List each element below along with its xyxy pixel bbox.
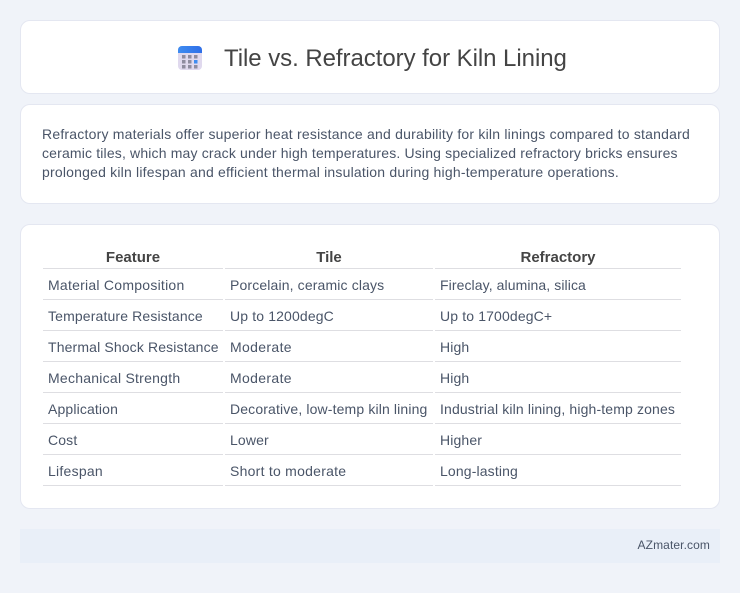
summary panel <box>20 104 720 204</box>
row: temperature resistance: Up to 1200degC <box>230 308 334 324</box>
row: lifespan: Lifespan <box>48 463 103 479</box>
comparison table <box>43 249 681 486</box>
title: Tile vs. Refractory for Kiln Lining <box>224 45 567 72</box>
header panel <box>20 20 720 94</box>
summary text: ceramic tiles, which may crack under high temperatures. Using specialized refractory bricks ensures <box>42 145 678 161</box>
column headers: Tile <box>316 249 342 266</box>
footer credit: AZmater.com <box>638 538 710 552</box>
row: lifespan: Long-lasting <box>440 463 518 479</box>
row: lifespan <box>48 463 518 479</box>
row: temperature resistance: Temperature Resistance <box>48 308 203 324</box>
column headers: Feature <box>106 249 160 266</box>
column headers: Refractory <box>520 249 596 266</box>
row: thermal shock resistance: High <box>440 339 469 355</box>
row: application: Industrial kiln lining, high-temp zones <box>440 401 675 417</box>
row: material composition: Porcelain, ceramic clays <box>230 277 384 293</box>
row: mechanical strength <box>48 370 469 386</box>
row: cost: Higher <box>440 432 482 448</box>
table panel <box>20 224 720 509</box>
row: lifespan: Short to moderate <box>230 463 346 479</box>
row: cost <box>48 432 482 448</box>
row: application: Application <box>48 401 118 417</box>
footer bar <box>20 529 720 563</box>
row: application <box>48 401 675 417</box>
row: temperature resistance <box>48 308 552 324</box>
row: cost: Cost <box>48 432 77 448</box>
row: mechanical strength: High <box>440 370 469 386</box>
row: temperature resistance: Up to 1700degC+ <box>440 308 552 324</box>
row: mechanical strength: Mechanical Strength <box>48 370 180 386</box>
row: thermal shock resistance <box>48 339 469 355</box>
summary text: prolonged kiln lifespan and efficient thermal insulation during high-temperature operations. <box>42 164 619 180</box>
icon: calendar <box>178 46 202 70</box>
row: thermal shock resistance: Thermal Shock Resistance <box>48 339 219 355</box>
row: thermal shock resistance: Moderate <box>230 339 292 355</box>
column headers <box>106 249 596 266</box>
row: mechanical strength: Moderate <box>230 370 292 386</box>
row: application: Decorative, low-temp kiln lining <box>230 401 427 417</box>
summary text <box>42 126 690 180</box>
row: cost: Lower <box>230 432 269 448</box>
summary text: Refractory materials offer superior heat resistance and durability for kiln linings compared to standard <box>42 126 690 142</box>
row: material composition: Material Composition <box>48 277 184 293</box>
row: material composition <box>48 277 586 293</box>
row: material composition: Fireclay, alumina, silica <box>440 277 586 293</box>
